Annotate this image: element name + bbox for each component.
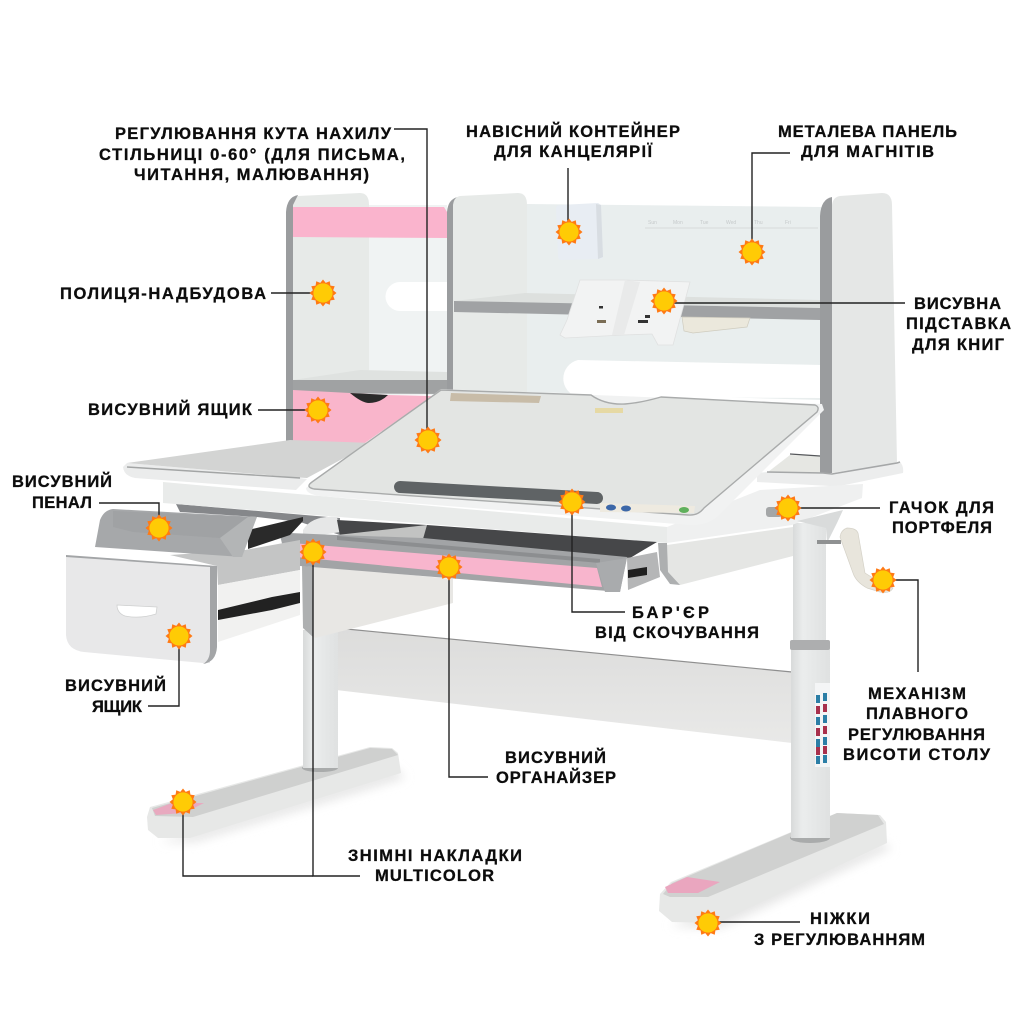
organizer rail	[627, 552, 660, 590]
drawer inner wall	[170, 540, 300, 585]
label: hanging container: НАВІСНИЙ КОНТЕЙНЕР	[466, 122, 680, 141]
calendar scale on magnetic panel: Wed	[726, 220, 736, 226]
label: height mechanism: ВИСОТИ СТОЛУ	[843, 746, 991, 764]
pen ledge	[400, 487, 597, 498]
collar	[790, 640, 830, 650]
left desk surface	[123, 440, 372, 490]
label: book stand: ВИСУВНА	[914, 295, 1001, 313]
label: bag hook	[889, 499, 994, 537]
label: pull-out drawer lower: ЯЩИК	[92, 698, 143, 716]
label: pull-out drawer upper: ВИСУВНИЙ ЯЩИК	[88, 400, 253, 419]
right leg	[659, 523, 887, 923]
desk apron front	[163, 482, 667, 543]
dark interior	[337, 520, 657, 558]
roller behind organizer	[303, 517, 340, 538]
label: roll-off barrier: БАР'ЄР	[632, 604, 709, 622]
right side panel	[757, 193, 903, 486]
label: pull-out drawer lower: ВИСУВНИЙ	[65, 676, 166, 695]
upper shelf	[454, 293, 820, 320]
warning sticker	[595, 408, 623, 413]
sticker strip top	[450, 393, 541, 403]
pencil container	[556, 203, 603, 260]
calendar scale on magnetic panel: Mon	[673, 220, 683, 226]
label: metal panel: ДЛЯ МАГНІТІВ	[801, 143, 934, 161]
calendar scale on magnetic panel: Fri	[785, 220, 791, 226]
right under-desk box	[658, 527, 793, 585]
drawer side	[218, 570, 300, 642]
label: height mechanism: РЕГУЛЮВАННЯ	[848, 726, 985, 744]
slot	[386, 282, 447, 311]
lower shelf	[293, 370, 447, 380]
left foot	[147, 745, 401, 838]
pink drawer	[293, 390, 432, 445]
left big drawer	[66, 540, 300, 664]
label: metal panel: МЕТАЛЕВА ПАНЕЛЬ	[778, 123, 957, 141]
label: removable covers	[348, 847, 522, 885]
label: organizer	[496, 748, 616, 787]
label: add-on shelf: ПОЛИЦЯ-НАДБУДОВА	[60, 285, 266, 303]
drawer front	[66, 556, 210, 663]
label: removable covers: ЗНІМНІ НАКЛАДКИ	[348, 847, 522, 865]
bag hook	[766, 507, 782, 517]
label: pencil tray	[12, 472, 112, 512]
label: adjustable feet	[754, 910, 925, 949]
label: adjustable feet: НІЖКИ	[810, 910, 870, 928]
label: tilt adjustment: РЕГУЛЮВАННЯ КУТА НАХИЛУ	[115, 125, 392, 143]
label: adjustable feet: З РЕГУЛЮВАННЯМ	[754, 931, 925, 949]
height chart sticker	[815, 683, 830, 767]
label: removable covers: MULTICOLOR	[375, 867, 494, 885]
leader lines	[99, 129, 918, 922]
label: height mechanism: МЕХАНІЗМ	[868, 685, 966, 703]
organizer drawer	[280, 517, 660, 592]
label: hanging container: ДЛЯ КАНЦЕЛЯРІЇ	[494, 143, 652, 161]
organizer tray	[337, 525, 427, 541]
label: height mechanism: ПЛАВНОГО	[866, 705, 968, 723]
label: book stand: ДЛЯ КНИГ	[912, 336, 1005, 354]
left shelf unit	[286, 193, 447, 445]
calendar scale on magnetic panel	[645, 220, 818, 228]
pink front	[292, 543, 602, 587]
floor shadows	[160, 768, 892, 928]
calendar scale on magnetic panel: Thu	[754, 220, 763, 226]
label: pencil tray: ПЕНАЛ	[32, 494, 92, 512]
shadow strip under apron	[176, 504, 340, 535]
label: bag hook: ПОРТФЕЛЯ	[892, 519, 992, 537]
tilting tabletop	[306, 389, 824, 525]
label: metal panel	[778, 123, 957, 161]
left leg	[147, 630, 401, 838]
calendar scale on magnetic panel: Sun	[648, 220, 657, 226]
label: tilt adjustment	[99, 125, 405, 184]
cable slot	[563, 360, 822, 398]
desk illustration	[66, 193, 903, 928]
hutch back panel	[527, 204, 822, 400]
label: pull-out drawer lower	[65, 676, 166, 716]
calendar scale on magnetic panel: Tue	[700, 220, 709, 226]
label: book stand: ПІДСТАВКА	[906, 315, 1011, 333]
center divider panel	[447, 193, 527, 392]
apron right side	[667, 484, 863, 543]
organizer end cap	[596, 558, 627, 592]
label: organizer: ВИСУВНИЙ	[505, 748, 606, 767]
label: hanging container	[466, 122, 680, 161]
height bracket and crank	[797, 510, 893, 592]
label: organizer: ОРГАНАЙЗЕР	[496, 768, 616, 787]
label: bag hook: ГАЧОК ДЛЯ	[889, 499, 994, 517]
crank handle	[840, 528, 893, 592]
label: book stand	[906, 295, 1011, 354]
drawer handle	[117, 605, 157, 617]
marker suns	[146, 218, 896, 936]
label: tilt adjustment: СТІЛЬНИЦІ 0-60° (ДЛЯ ПИСЬМА,	[99, 146, 405, 164]
label: pencil tray: ВИСУВНИЙ	[12, 472, 112, 491]
pink top panel	[293, 207, 447, 238]
center under-drawer	[303, 565, 453, 638]
label: roll-off barrier: ВІД СКОЧУВАННЯ	[595, 624, 759, 642]
right foot	[659, 813, 887, 923]
label: tilt adjustment: ЧИТАННЯ, МАЛЮВАННЯ)	[134, 166, 369, 184]
label: height mechanism	[843, 685, 991, 764]
pencil tray	[95, 509, 303, 557]
desk right surface	[768, 455, 820, 473]
function icons strip	[600, 503, 695, 513]
desk right edge	[757, 462, 903, 486]
crossbeam	[336, 628, 792, 743]
label: roll-off barrier	[595, 604, 759, 642]
organizer frame	[280, 533, 627, 592]
book stand	[560, 280, 750, 345]
